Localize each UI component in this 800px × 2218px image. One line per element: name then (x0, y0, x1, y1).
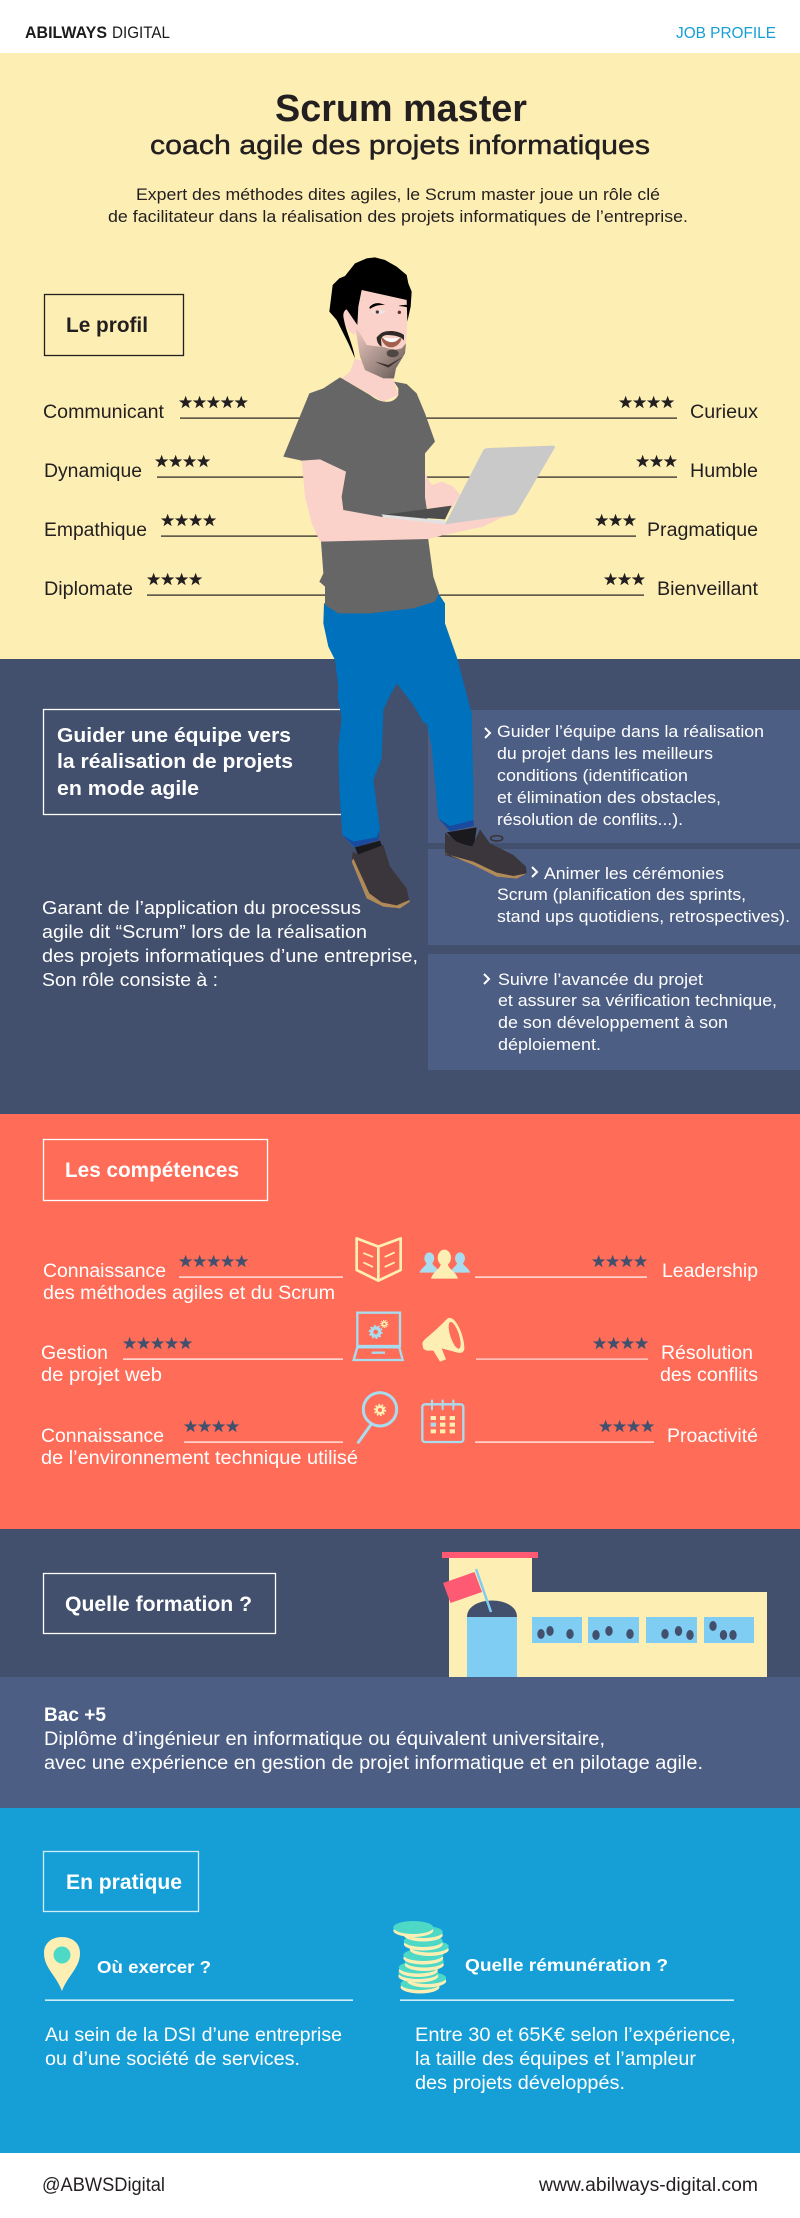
divider and text: rémunération (400, 2000, 736, 2094)
rating: Empathique (44, 514, 321, 541)
divider and text: rémunération: des projets développés. (415, 2073, 625, 2094)
panel: le profil (0, 53, 800, 659)
heading: quelle rémunération: Quelle rémunération ? (465, 1955, 668, 1975)
rating: Dynamique (44, 455, 307, 482)
icon: book (357, 1238, 401, 1281)
rating: Communicant (43, 396, 300, 423)
rating: Pragmatique (436, 514, 758, 541)
text: garant du processus: Garant de l’application du processus (42, 897, 361, 918)
icon: laptop (354, 1313, 403, 1360)
heading: en pratique (44, 1852, 198, 1912)
rating: Humble: Humble (690, 461, 758, 482)
rating: méthodes agiles: Connaissance (43, 1261, 166, 1282)
icon: magnifier (358, 1393, 397, 1442)
illustration: scrum master figure (283, 257, 555, 908)
heading: quelle formation: Quelle formation ? (65, 1593, 252, 1616)
icon: megaphone (423, 1318, 464, 1362)
heading: en pratique: En pratique (66, 1871, 182, 1894)
heading: guider une équipe (44, 710, 344, 814)
rating: gestion de projet: Gestion (41, 1343, 108, 1364)
card: guider l'équipe: résolution de conflits...). (497, 811, 683, 829)
card: guider l'équipe: du projet dans les meilleurs (497, 745, 713, 763)
rating: leadership (475, 1255, 758, 1282)
rating: environnement technique: Connaissance (41, 1426, 164, 1447)
card: suivre l'avancée: déploiement. (498, 1036, 601, 1054)
card: animer les cérémonies: stand ups quotidiens, retrospectives). (497, 908, 790, 926)
rating: résolution des conflits: Résolution (661, 1343, 753, 1364)
rating: Dynamique: Dynamique (44, 461, 142, 482)
header: DIGITAL (112, 24, 170, 42)
header: ABILWAYS (25, 24, 107, 42)
rating: résolution des conflits (476, 1337, 758, 1386)
intro text: de facilitateur dans la réalisation des projets informatiques de l’entreprise. (108, 207, 688, 226)
rating: résolution des conflits: des conflits (660, 1365, 758, 1386)
footer: www.abilways-digital.com (538, 2175, 758, 2196)
text: garant du processus: Son rôle consiste à : (42, 969, 218, 990)
divider and text: où exercer (45, 2000, 353, 2070)
intro text (108, 185, 688, 226)
text: garant du processus: agile dit “Scrum” lors de la réalisation (42, 921, 367, 942)
rating: Communicant: Communicant (43, 402, 165, 423)
heading: guider une équipe: la réalisation de projets (57, 751, 293, 773)
divider and text: où exercer: Au sein de la DSI d’une entreprise (45, 2025, 342, 2046)
card: guider l'équipe: et élimination des obstacles, (497, 789, 721, 807)
footer (0, 2153, 800, 2218)
panel: bac +5: avec une expérience en gestion de projet informatique et en pilotage agile. (44, 1753, 703, 1774)
footer: @ABWSDigital (42, 2175, 165, 2196)
heading: le profil (44, 294, 184, 356)
heading: les compétences: Les compétences (65, 1159, 239, 1182)
text: garant du processus (42, 897, 418, 990)
panel: en pratique (0, 1808, 800, 2153)
card: guider l'équipe: conditions (identification (497, 767, 688, 785)
icon: calendar (422, 1400, 463, 1442)
header: JOB PROFILE (676, 25, 776, 42)
subtitle: coach agile des projets informatiques (150, 130, 650, 160)
rating: méthodes agiles: des méthodes agiles et du Scrum (43, 1283, 335, 1304)
heading: le profil: Le profil (66, 314, 148, 337)
heading: guider une équipe: Guider une équipe vers (57, 725, 291, 747)
rating: Curieux: Curieux (690, 402, 759, 423)
illustration: school building (442, 1552, 767, 1677)
rating: Diplomate (44, 573, 332, 600)
card: animer les cérémonies (428, 849, 800, 945)
rating: Empathique: Empathique (44, 520, 147, 541)
card: suivre l'avancée: et assurer sa vérification technique, (498, 992, 777, 1010)
panel: guider une équipe (0, 659, 800, 1114)
rating: environnement technique: de l’environnement technique utilisé (41, 1448, 358, 1469)
rating: Diplomate: Diplomate (44, 579, 133, 600)
rating: Curieux (424, 396, 759, 423)
card: suivre l'avancée (428, 954, 800, 1070)
rating: Pragmatique: Pragmatique (647, 520, 758, 541)
figure torso, arms and head (283, 257, 555, 613)
rating: proactivité (475, 1420, 758, 1447)
rating: environnement technique (41, 1420, 358, 1469)
icon: coins (393, 1921, 449, 1994)
icon: people (419, 1250, 470, 1279)
divider and text: où exercer: ou d’une société de services. (45, 2049, 300, 2070)
rating: gestion de projet (41, 1337, 343, 1386)
card: suivre l'avancée: Suivre l’avancée du projet (498, 971, 703, 989)
heading: quelle formation (44, 1574, 276, 1634)
panel: bac +5 (0, 1677, 800, 1808)
text: garant du processus: des projets informatiques d’une entreprise, (42, 945, 418, 966)
rating: leadership: Leadership (662, 1261, 758, 1282)
title: Scrum master (275, 88, 527, 130)
divider and text: rémunération: Entre 30 et 65K€ selon l’expérience, (415, 2025, 736, 2046)
heading: guider une équipe: en mode agile (57, 778, 199, 800)
header (0, 0, 800, 53)
divider and text: rémunération: la taille des équipes et l’ampleur (415, 2049, 697, 2070)
rating: Humble (424, 455, 758, 482)
panel: les compétences (0, 1114, 800, 1529)
heading: les compétences (44, 1140, 268, 1200)
rating: gestion de projet: de projet web (41, 1365, 162, 1386)
intro text: Expert des méthodes dites agiles, le Scrum master joue un rôle clé (136, 185, 660, 204)
card: guider l'équipe (428, 710, 800, 843)
panel: bac +5: Diplôme d’ingénieur en informatique ou équivalent universitaire, (44, 1729, 605, 1750)
rating: proactivité: Proactivité (667, 1426, 758, 1447)
icon: location pin (44, 1937, 80, 1991)
heading: où exercer: Où exercer ? (97, 1957, 211, 1977)
card: suivre l'avancée: de son développement à son (498, 1014, 728, 1032)
figure legs and shoes (323, 593, 527, 908)
card: animer les cérémonies: Animer les cérémonies (544, 865, 724, 883)
card: guider l'équipe: Guider l’équipe dans la réalisation (497, 723, 764, 741)
rating: méthodes agiles (43, 1255, 343, 1304)
card: animer les cérémonies: Scrum (planification des sprints, (497, 886, 746, 904)
rating: Bienveillant: Bienveillant (657, 579, 759, 600)
rating: Bienveillant (430, 573, 759, 600)
panel: bac +5: Bac +5 (44, 1705, 106, 1726)
panel: quelle formation (0, 1529, 800, 1677)
